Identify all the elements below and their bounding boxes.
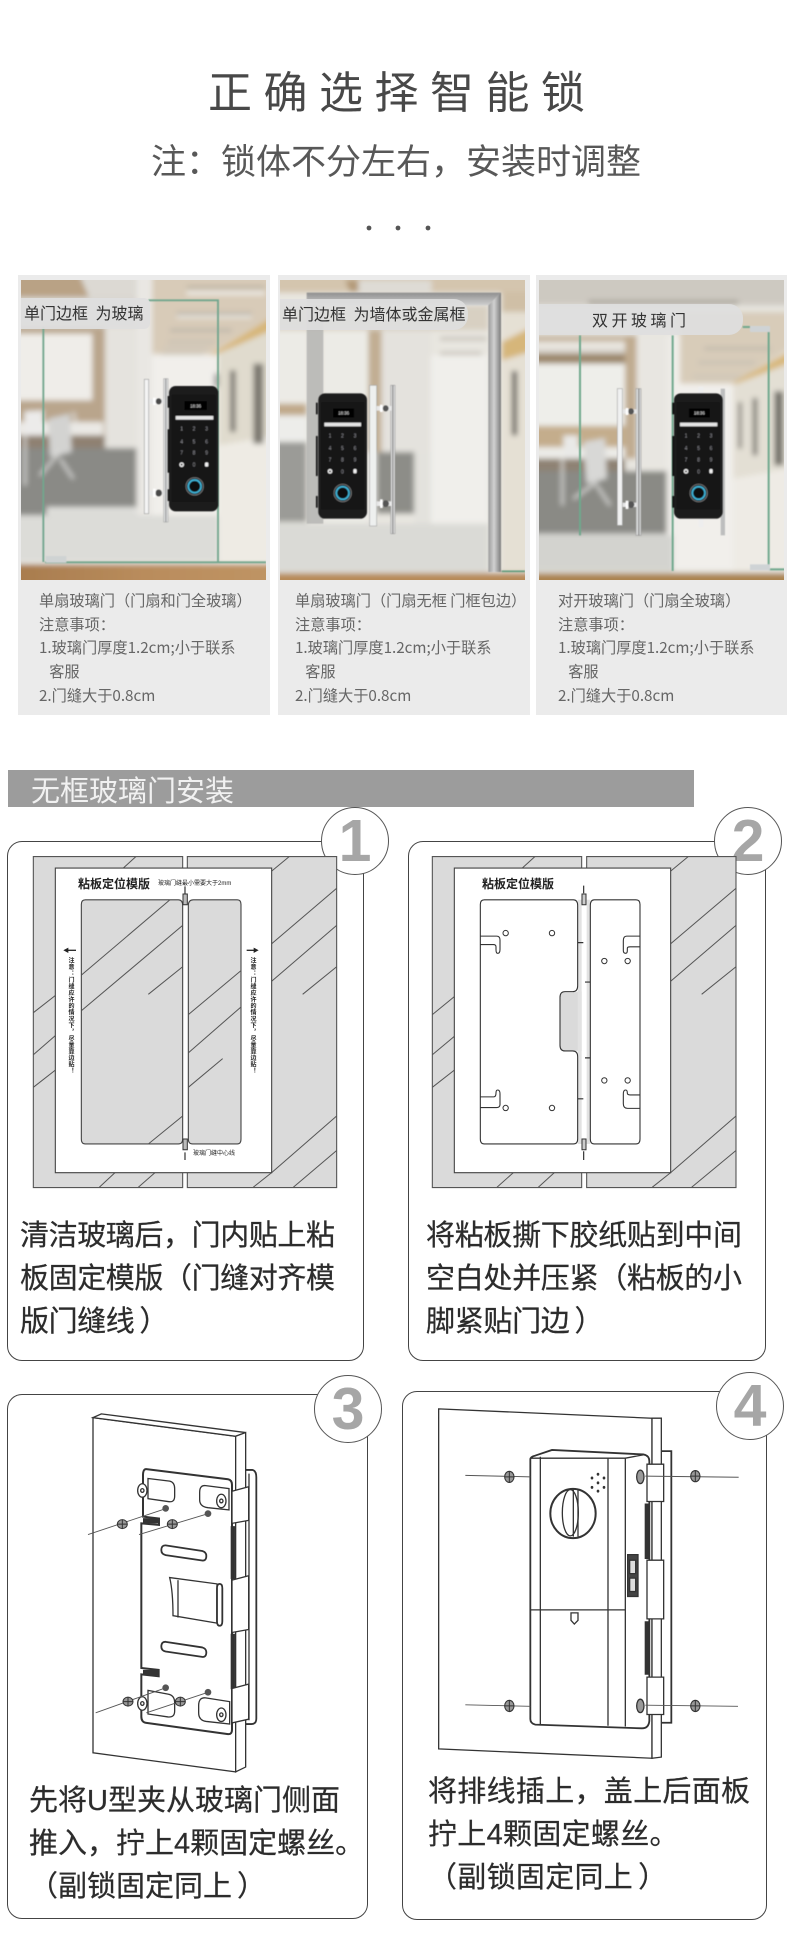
text block: double door notes: 客服 — [568, 660, 599, 682]
step 4 instruction — [428, 1776, 750, 1894]
step 1 template diagram — [32, 856, 338, 1188]
step 1 instruction: 板固定模版（门缝对齐模 — [20, 1262, 335, 1294]
text block: framed door notes: 单扇玻璃门（门扇无框 门框包边） — [295, 589, 526, 611]
lock: 3 — [710, 433, 713, 439]
lock — [316, 393, 367, 519]
lock: 4 — [180, 439, 183, 445]
lock: 18:36 — [190, 403, 202, 408]
lock: 8 — [697, 457, 700, 463]
step 2 instruction — [426, 1220, 742, 1338]
label: single door frame wall or metal — [280, 299, 468, 330]
lock: 2 — [341, 433, 344, 439]
subtitle: 注：锁体不分左右，安装时调整 — [151, 142, 641, 182]
step 3 number badge — [314, 1375, 382, 1443]
step 3 instruction — [29, 1785, 364, 1903]
step 3 instruction: 推入，拧上4颗固定螺丝。 — [29, 1828, 364, 1860]
panel: framed door card — [278, 275, 530, 715]
lock: 7 — [180, 451, 183, 457]
step 1 instruction — [20, 1220, 335, 1338]
lock: 3 — [354, 433, 357, 439]
photo: double glass door with lock — [539, 280, 784, 580]
panel: single glass door card — [18, 275, 270, 715]
text block: single glass door notes: 单扇玻璃门（门扇和门全玻璃） — [39, 589, 252, 611]
step 4 instruction: 拧上4颗固定螺丝。 — [428, 1819, 679, 1851]
panel: step 1 — [7, 807, 389, 1361]
text block: framed door notes: 1.玻璃门厚度1.2cm;小于联系 — [295, 636, 491, 658]
lock: 1 — [180, 427, 183, 433]
lock: 6 — [354, 446, 357, 452]
lock: 2 — [697, 433, 700, 439]
text block: single glass door notes: 注意事项： — [39, 613, 115, 635]
step 2 instruction: 空白处并压紧（粘板的小 — [426, 1262, 742, 1294]
step 1 instruction: 清洁玻璃后，门内贴上粘 — [20, 1220, 335, 1252]
text block: single glass door notes: 1.玻璃门厚度1.2cm;小于联系 — [39, 636, 235, 658]
step 1 number badge — [321, 807, 389, 875]
center line note: 玻璃门缝中心线 — [193, 1151, 235, 1157]
step 3 instruction: （副锁固定同上） — [29, 1871, 266, 1903]
lock: 9 — [205, 451, 208, 457]
step 4 number badge: 4 — [734, 1373, 766, 1439]
lock: 5 — [193, 439, 196, 445]
text block: single glass door notes: 2.门缝大于0.8cm — [39, 684, 155, 706]
text block: framed door notes: 注意事项： — [295, 613, 371, 635]
lock: 6 — [710, 446, 713, 452]
label: single door frame glass: 单门边框 为玻璃 — [24, 306, 143, 323]
lock: 7 — [329, 457, 332, 463]
step 3 instruction: 先将U型夹从玻璃门侧面 — [29, 1785, 340, 1817]
step 4 lock body diagram — [438, 1408, 739, 1759]
step 3 U clip diagram — [88, 1413, 258, 1773]
lock: 7 — [685, 457, 688, 463]
lock: 5 — [697, 446, 700, 452]
lock: 9 — [710, 457, 713, 463]
step 4 number badge — [716, 1372, 784, 1440]
text block: single glass door notes: 客服 — [49, 660, 80, 682]
panel: step 3 — [7, 1375, 382, 1919]
text block: double door notes: 注意事项： — [558, 613, 634, 635]
text block: double door notes — [558, 589, 754, 706]
photo: single door with metal frame and lock — [280, 280, 525, 580]
text block: framed door notes: 2.门缝大于0.8cm — [295, 684, 411, 706]
title: 正确选择智能锁 — [208, 68, 596, 118]
step 2 number badge — [714, 807, 782, 875]
lock: 1 — [329, 433, 332, 439]
right vertical note: 注意：门缝应许的情况下，尽量靠边贴！ — [249, 957, 255, 1074]
step 1 number badge: 1 — [339, 808, 371, 874]
text block: framed door notes: 客服 — [305, 660, 336, 682]
panel: double door card — [536, 275, 787, 715]
lock — [672, 393, 723, 519]
section heading bar — [8, 770, 694, 807]
lock: 4 — [329, 446, 332, 452]
lock: 2 — [193, 427, 196, 433]
step 2 adhesive plate diagram — [432, 856, 737, 1188]
lock — [168, 386, 218, 511]
photo: single glass door with lock — [21, 280, 266, 580]
label: single door frame glass — [21, 298, 150, 329]
lock: 0 — [193, 463, 196, 469]
step 2 instruction: 将粘板撕下胶纸贴到中间 — [426, 1220, 742, 1252]
lock: 0 — [341, 469, 344, 475]
template title: 粘板定位模版 — [78, 877, 150, 891]
text block: double door notes: 对开玻璃门（门扇全玻璃） — [558, 589, 740, 611]
text block: framed door notes — [295, 589, 526, 706]
label: double glass door: 双开玻璃门 — [592, 313, 690, 330]
text block: double door notes: 1.玻璃门厚度1.2cm;小于联系 — [558, 636, 754, 658]
text block: single glass door notes — [39, 589, 252, 706]
panel: step 2 — [408, 807, 782, 1361]
decorative three dots — [366, 226, 430, 230]
label: double glass door — [539, 304, 743, 335]
lock: 9 — [354, 457, 357, 463]
left vertical note: 注意：门缝应许的情况下，尽量靠边贴！ — [67, 957, 73, 1074]
step 2 instruction: 脚紧贴门边） — [426, 1306, 603, 1338]
text block: double door notes: 2.门缝大于0.8cm — [558, 684, 674, 706]
label: single door frame wall or metal: 单门边框 为墙体或金属框 — [282, 307, 465, 324]
lock: 1 — [685, 433, 688, 439]
step 2 number badge: 2 — [732, 808, 764, 874]
step 1 instruction: 版门缝线） — [20, 1306, 168, 1338]
panel: step 4 — [402, 1372, 784, 1920]
lock: 18:36 — [694, 411, 705, 416]
lock: 3 — [205, 427, 208, 433]
template title: 粘板定位模版 — [482, 877, 554, 891]
lock: 8 — [341, 457, 344, 463]
lock: 5 — [341, 446, 344, 452]
lock: 0 — [697, 469, 700, 475]
lock: 6 — [205, 439, 208, 445]
step 3 number badge: 3 — [332, 1376, 364, 1442]
lock: 4 — [685, 446, 688, 452]
step 4 instruction: 将排线插上，盖上后面板 — [428, 1776, 750, 1808]
step 4 instruction: （副锁固定同上） — [428, 1862, 667, 1894]
gap note: 玻璃门缝最小需要大于2mm — [158, 881, 231, 887]
lock: 18:36 — [338, 411, 350, 416]
lock: 8 — [193, 451, 196, 457]
